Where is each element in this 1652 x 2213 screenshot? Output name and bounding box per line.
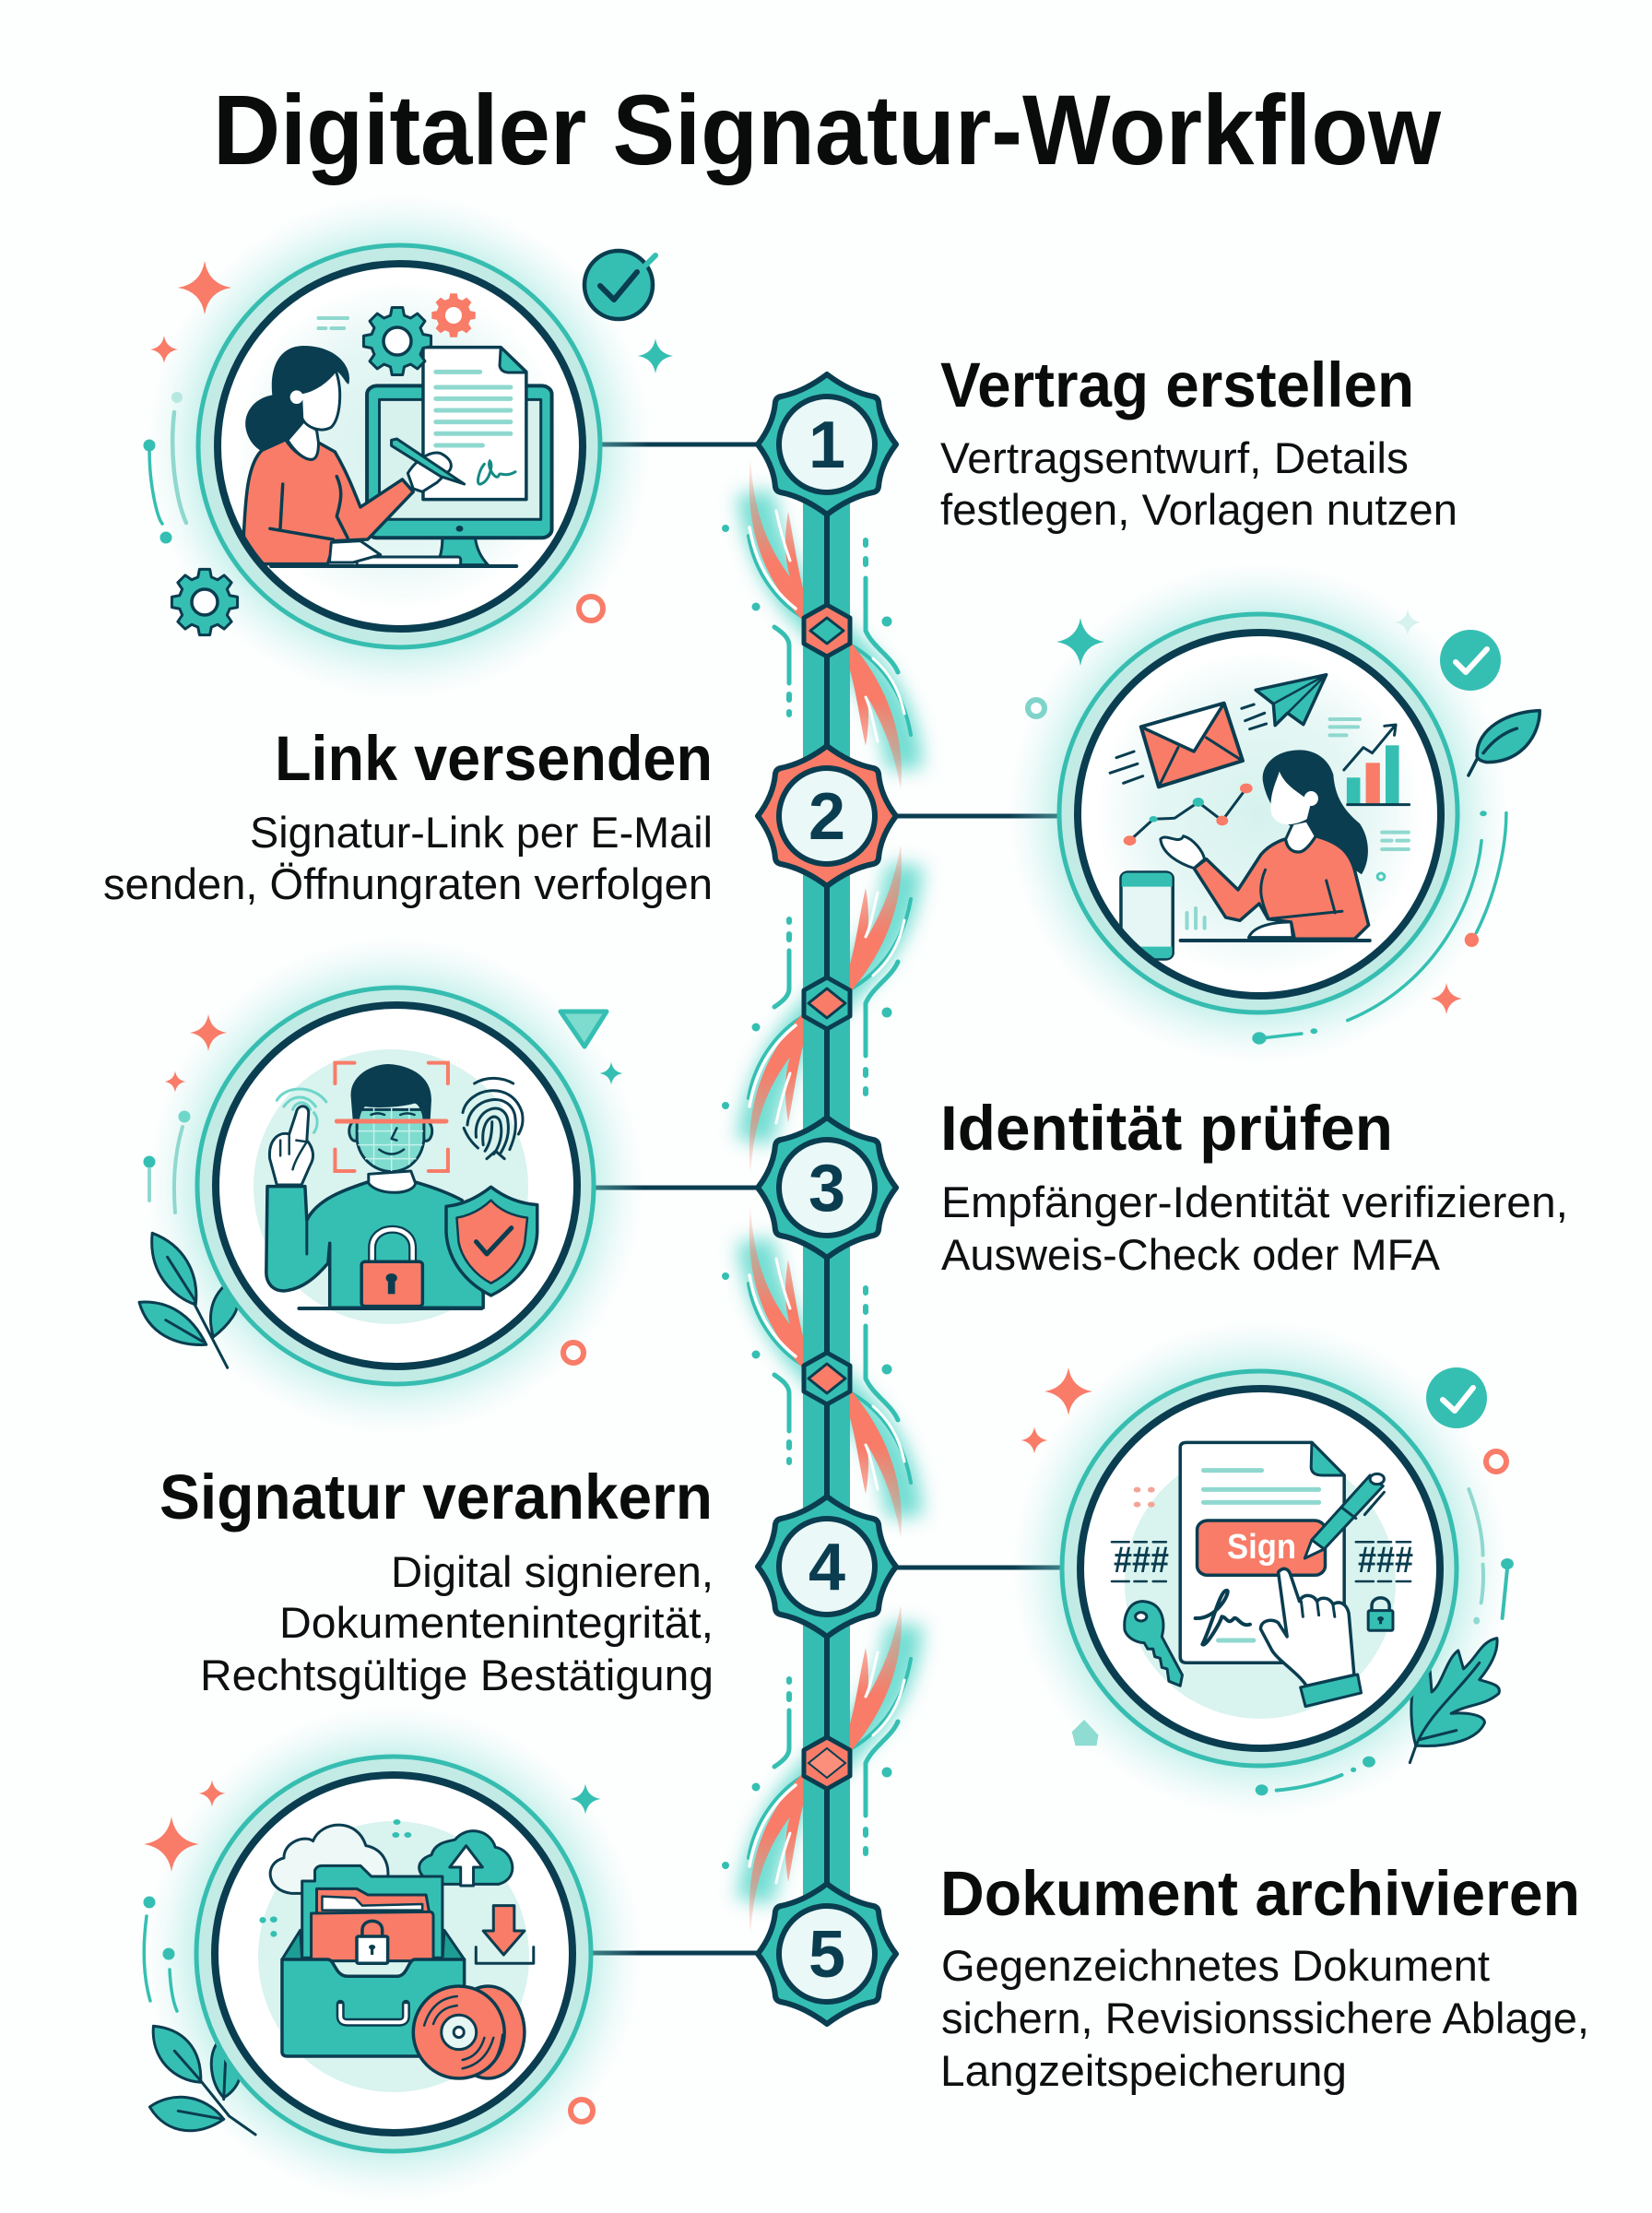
hex joint 3: [804, 1353, 850, 1404]
number badge 4: 4: [808, 1531, 845, 1604]
number badge 1: 1: [808, 408, 845, 482]
step 3 text: [940, 1093, 1568, 1279]
connector line step 1: [590, 443, 761, 446]
step 5 text: Dokument archivieren: [940, 1858, 1580, 1929]
number badge 1: [758, 374, 896, 515]
title: Digitaler Signatur-Workflow: [213, 74, 1442, 185]
timeline spine: [803, 444, 850, 1954]
ring: step 5: [215, 1775, 572, 2133]
illustration: document signing: [1112, 1442, 1410, 1707]
step 5 text: [940, 1858, 1589, 2095]
panel: step 5 illustration: [144, 1707, 641, 2201]
ring: step 3: [216, 1005, 577, 1367]
step 4 text: [159, 1462, 714, 1699]
ring: step 1: [218, 264, 583, 629]
sparkles and accents: [144, 1780, 601, 2122]
label: left hash: ###: [1114, 1540, 1169, 1580]
timeline swoosh 4: [722, 1604, 911, 1935]
step 2 text: Link versenden: [275, 723, 713, 794]
icon: leaves: [149, 2026, 255, 2135]
number badge 3: [758, 1118, 896, 1258]
sparkles and accents: [144, 1012, 623, 1363]
number badge 5: 5: [808, 1918, 845, 1992]
number badge 5: [758, 1884, 896, 2024]
icon: oak leaf: [1410, 1639, 1499, 1763]
sparkles and accents: [144, 261, 673, 621]
illustration: woman sending mail: [1110, 675, 1410, 959]
step 4 text: Digital signieren,: [391, 1547, 714, 1596]
icon: leaf: [1252, 711, 1540, 1045]
connector line step 5: [581, 1951, 761, 1955]
panel: step 3 illustration: [139, 939, 643, 1433]
illustration: archive box: [259, 1819, 534, 2078]
connector line step 3: [585, 1186, 761, 1189]
timeline swoosh 2: [722, 845, 911, 1175]
illustration: woman signing at monitor: [243, 318, 552, 566]
step 3 text: Empfänger-Identität verifizieren,: [941, 1178, 1568, 1226]
icon: check badge: [1426, 1367, 1487, 1428]
icon: leaves: [139, 1233, 237, 1367]
connector line step 2: [893, 813, 1069, 819]
step 4 text: Dokumentenintegrität,: [279, 1598, 714, 1647]
panel: step 1 illustration: [144, 195, 673, 697]
sparkles and accents: [1021, 1367, 1514, 1795]
step 3 text: Ausweis-Check oder MFA: [941, 1230, 1441, 1279]
step 2 text: [103, 723, 713, 908]
step 1 text: [940, 349, 1457, 534]
step 3 text: Identität prüfen: [940, 1093, 1393, 1164]
illustration: identity check: [266, 1063, 537, 1308]
number badge 3: 3: [808, 1152, 845, 1225]
step 5 text: Gegenzeichnetes Dokument: [941, 1941, 1490, 1990]
step 4 text: Signatur verankern: [159, 1462, 713, 1533]
step 5 text: sichern, Revisionssichere Ablage,: [941, 1994, 1589, 2042]
step 1 text: festlegen, Vorlagen nutzen: [940, 485, 1457, 534]
icon: check badge: [1440, 630, 1501, 691]
ring: step 4: [1080, 1389, 1440, 1748]
icon: coral gear: [431, 293, 476, 337]
step 5 text: Langzeitspeicherung: [940, 2046, 1347, 2095]
icon: teal gear: [363, 307, 431, 375]
panel: step 4 illustration: [1013, 1321, 1514, 1816]
timeline swoosh 1: [722, 459, 911, 789]
hex joint 4: [804, 1737, 850, 1789]
step 2 text: Signatur-Link per E-Mail: [250, 808, 713, 857]
timeline swoosh 3: [722, 1207, 911, 1537]
icon: bottom gear: [171, 569, 238, 635]
label: Sign button text: Sign: [1227, 1528, 1296, 1567]
label: right hash: ###: [1358, 1540, 1413, 1580]
number badge 4: [758, 1497, 896, 1637]
icon: check badge: [584, 251, 655, 319]
sparkles and accents: [1028, 609, 1462, 1014]
step 2 text: senden, Öffnungraten verfolgen: [103, 859, 713, 908]
number badge 2: [758, 746, 896, 886]
panel: step 2 illustration: [1009, 564, 1540, 1062]
hex joint 2: [804, 977, 850, 1029]
step 1 text: Vertrag erstellen: [940, 349, 1414, 420]
number badge 2: 2: [808, 780, 845, 854]
ring: step 2: [1078, 633, 1441, 996]
step 4 text: Rechtsgültige Bestätigung: [200, 1651, 714, 1699]
connector line step 4: [893, 1566, 1069, 1569]
hex joint 1: [804, 605, 850, 657]
step 1 text: Vertragsentwurf, Details: [940, 433, 1409, 482]
